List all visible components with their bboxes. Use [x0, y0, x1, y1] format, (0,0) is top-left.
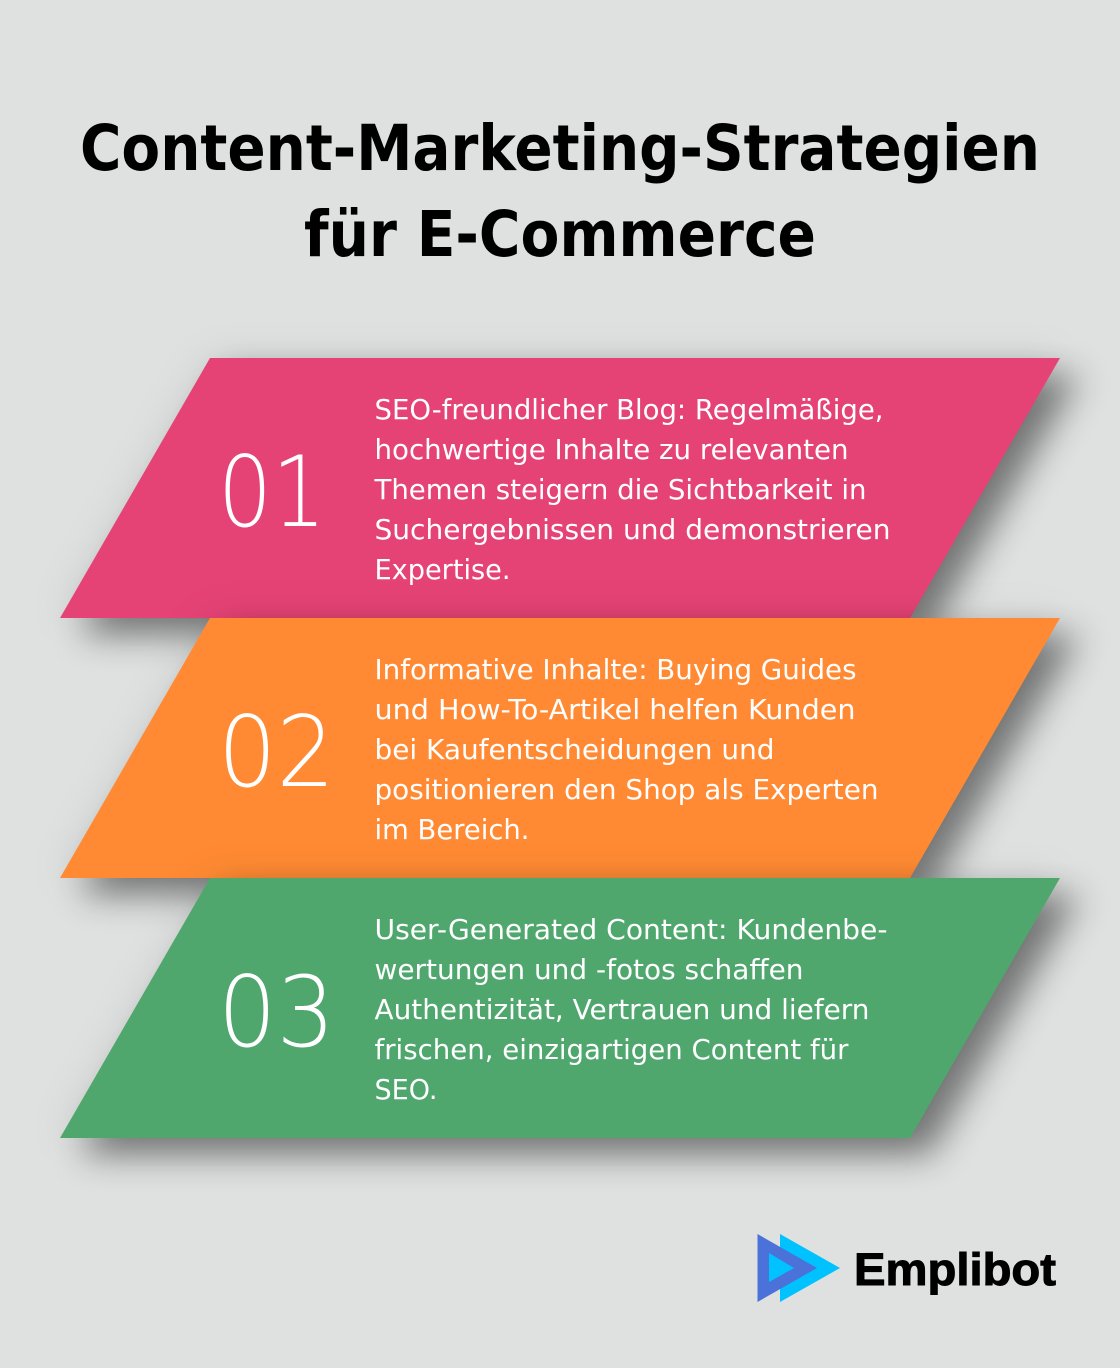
green parallelogram	[60, 878, 1060, 1138]
pink parallelogram	[60, 358, 1060, 618]
icon: play triangles	[758, 1234, 840, 1302]
text: step 01: SEO-freundlicher Blog: Regelmäßige,	[374, 393, 884, 426]
text: step 01: hochwertige Inhalte zu relevanten	[374, 433, 848, 466]
title: für E-Commerce	[304, 198, 816, 271]
wordmark: Emplibot	[854, 1244, 1056, 1295]
title: Content-Marketing-Strategien	[80, 112, 1040, 185]
number 01: 01	[218, 436, 326, 550]
text: step 03: User-Generated Content: Kundenbe-	[374, 913, 888, 946]
text: step 01: Expertise.	[374, 553, 510, 586]
text: step 02: bei Kaufentscheidungen und	[374, 733, 774, 766]
text: step 02: im Bereich.	[374, 813, 530, 846]
panel: step 02	[60, 618, 1060, 878]
panel: step 03	[60, 878, 1060, 1138]
text: step 01: Themen steigern die Sichtbarkeit in	[374, 473, 866, 506]
text: step 03: frischen, einzigartigen Content für	[374, 1033, 849, 1066]
text: step 02: positionieren den Shop als Experten	[374, 773, 878, 806]
text: step 02: Informative Inhalte: Buying Guides	[374, 653, 856, 686]
panel: step 01	[60, 358, 1060, 618]
text: step 03: wertungen und -fotos schaffen	[374, 953, 804, 986]
number 02: 02	[218, 696, 335, 810]
text: step 02	[374, 653, 878, 846]
text: step 03	[374, 913, 888, 1106]
text: step 03: Authentizität, Vertrauen und liefern	[374, 993, 870, 1026]
text: step 02: und How-To-Artikel helfen Kunden	[374, 693, 856, 726]
text: step 03: SEO.	[374, 1073, 438, 1106]
number 03: 03	[218, 956, 335, 1070]
text: step 01: Suchergebnissen und demonstrieren	[374, 513, 890, 546]
orange parallelogram	[60, 618, 1060, 878]
text: step 01	[374, 393, 891, 586]
title	[80, 112, 1040, 271]
logo: Emplibot	[758, 1234, 1056, 1302]
